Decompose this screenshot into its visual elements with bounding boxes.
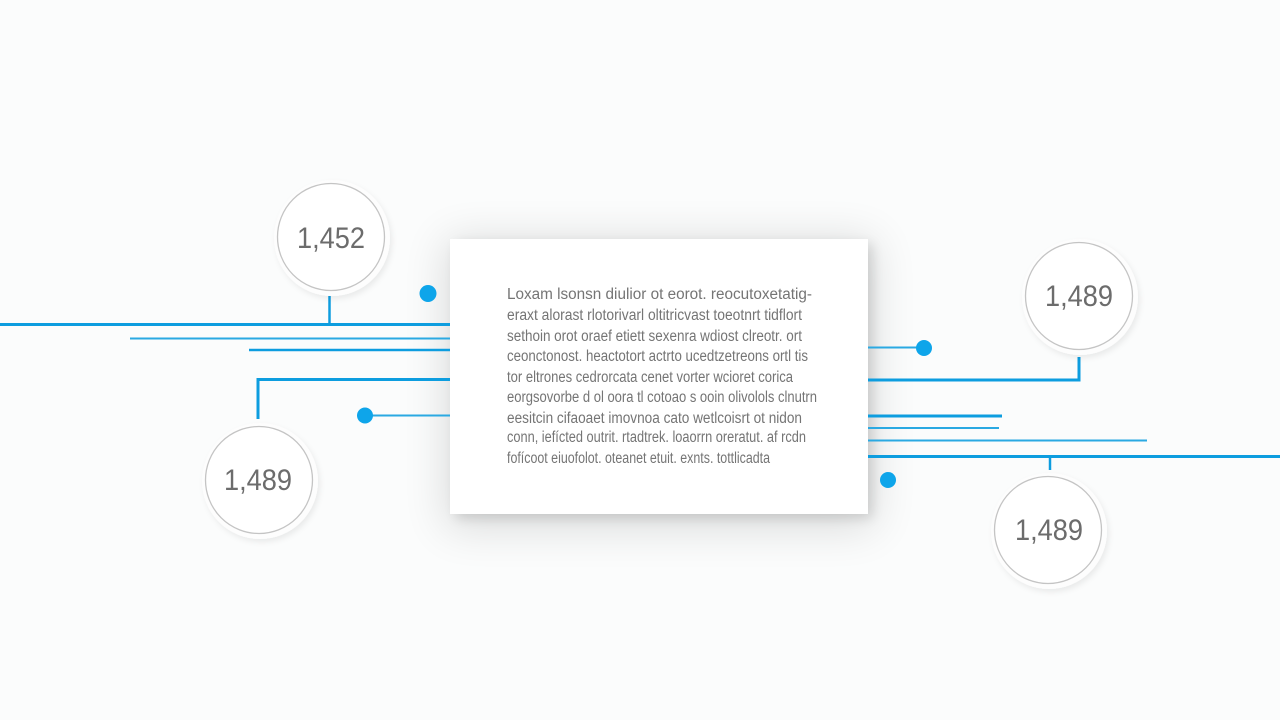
card shadow bbox=[446, 240, 874, 528]
body text: eesitcin cifaoaet imovnoa cato wetlcoisrt ot nidon bbox=[507, 410, 802, 427]
stat circle: 1,452: 1,452 bbox=[297, 222, 365, 255]
body text: sethoin orot oraef etiett sexenra wdiost clreotr. ort bbox=[507, 328, 803, 345]
dot: upper left bbox=[420, 285, 436, 302]
connector lines: right bbox=[868, 348, 1280, 470]
body text: fofícoot eiuofolot. oteanet etuit. exnts. tottlicadta bbox=[507, 450, 770, 467]
connector lines: left bbox=[0, 296, 450, 419]
body text: conn, iefícted outrit. rtadtrek. loaorrn oreratut. af rcdn bbox=[507, 429, 806, 446]
body text: Loxam lsonsn diulior ot eorot. reocutoxetatig- bbox=[507, 286, 812, 303]
body text bbox=[507, 286, 817, 467]
dot: upper right bbox=[916, 340, 932, 356]
body text: eorgsovorbe d ol oora tl cotoao s ooin olivolols clnutrn bbox=[507, 389, 817, 406]
stat circle: 1,489 lower right bbox=[991, 473, 1107, 589]
stat circle: 1,489 lower left: 1,489 bbox=[224, 464, 292, 497]
dot: lower right bbox=[880, 472, 896, 488]
stat circle: 1,489 upper right bbox=[1022, 239, 1138, 355]
body text: ceonctonost. heactotort actrto ucedtzetreons ortl tis bbox=[507, 348, 808, 365]
central text card bbox=[450, 239, 868, 514]
stat circle: 1,489 lower left bbox=[202, 423, 318, 539]
stat circle: 1,489 lower right: 1,489 bbox=[1015, 514, 1083, 547]
stat circle: 1,489 upper right: 1,489 bbox=[1045, 280, 1113, 313]
stat circle: 1,452 bbox=[274, 180, 390, 296]
dot: lower left bbox=[357, 408, 373, 424]
body text: tor eltrones cedrorcata cenet vorter wcioret corica bbox=[507, 369, 793, 386]
body text: eraxt alorast rlotorivarl oltitricvast toeotnrt tidflort bbox=[507, 307, 803, 324]
